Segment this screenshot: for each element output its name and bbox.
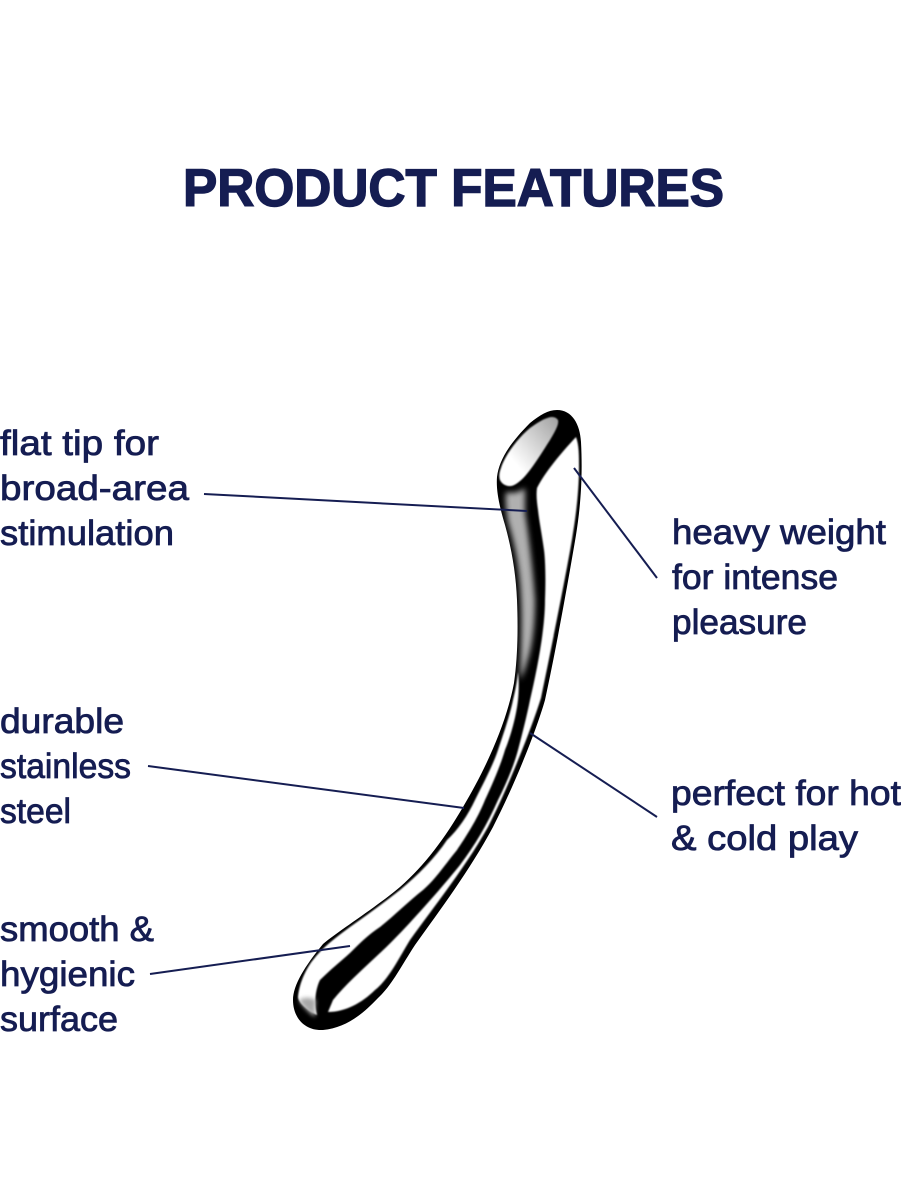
label: smooth surface: hygienic xyxy=(0,955,135,994)
label: smooth surface: smooth & xyxy=(0,910,154,949)
right side white reflection xyxy=(328,437,579,1012)
connector: durable steel xyxy=(148,766,464,808)
label: durable steel xyxy=(0,702,131,831)
connector: flat tip xyxy=(204,494,527,511)
label: durable steel: durable xyxy=(0,702,124,741)
label: flat tip xyxy=(0,424,190,553)
connector: hot and cold xyxy=(530,733,657,817)
title: PRODUCT FEATURES xyxy=(183,159,724,218)
label: durable steel: steel xyxy=(0,792,71,831)
label: heavy weight: for intense xyxy=(672,558,838,597)
label: hot and cold xyxy=(671,774,901,858)
silhouette xyxy=(293,410,582,1030)
neck grey reflection xyxy=(506,488,535,680)
left side white reflection xyxy=(298,672,519,1015)
label: durable steel: stainless xyxy=(0,747,131,786)
flat tip highlight xyxy=(499,417,558,486)
label: hot and cold: & cold play xyxy=(671,819,859,858)
bottom tip grey reflection xyxy=(299,998,316,1017)
label: heavy weight: pleasure xyxy=(672,603,807,642)
connector: heavy weight xyxy=(574,468,657,578)
label: flat tip: broad-area xyxy=(0,469,190,508)
label: heavy weight xyxy=(672,513,886,642)
connector: smooth surface xyxy=(150,946,350,974)
label: smooth surface xyxy=(0,910,154,1039)
label: heavy weight: heavy weight xyxy=(672,513,886,552)
label: flat tip: stimulation xyxy=(0,514,174,553)
label: flat tip: flat tip for xyxy=(0,424,159,463)
product: curved steel wand xyxy=(293,410,582,1030)
label: hot and cold: perfect for hot xyxy=(671,774,901,813)
label: smooth surface: surface xyxy=(0,1000,118,1039)
